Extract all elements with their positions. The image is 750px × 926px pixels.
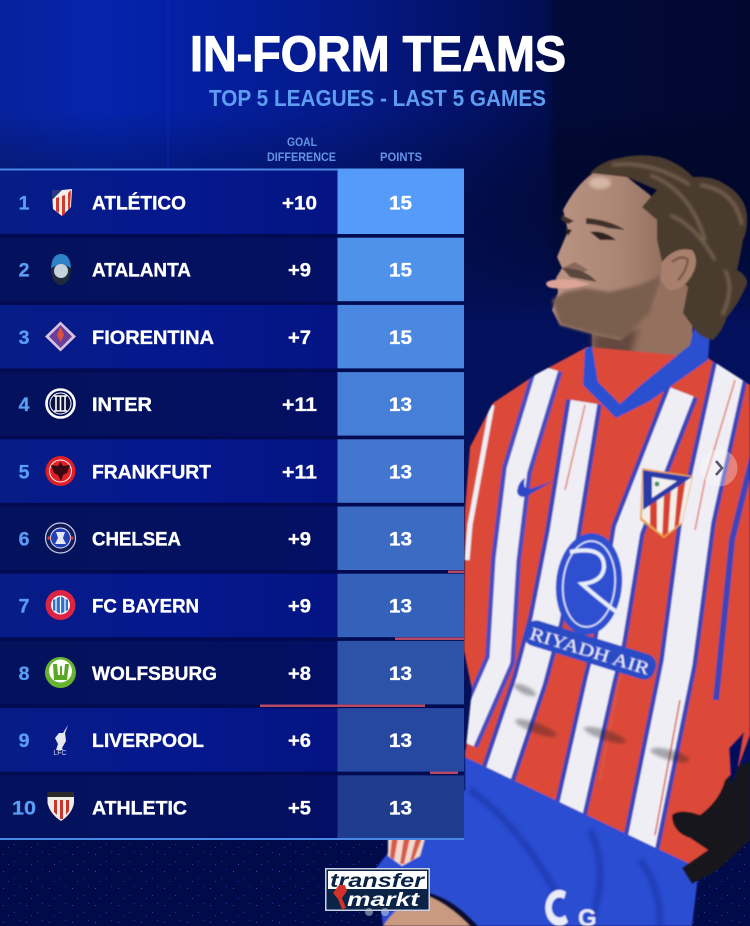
crest: Fiorentina xyxy=(45,322,76,352)
column header: points: POINTS xyxy=(380,150,422,164)
rank: 5 xyxy=(19,461,30,483)
goal difference: +11 xyxy=(282,394,317,416)
team name: INTER xyxy=(92,394,152,416)
points: 13 xyxy=(389,461,412,483)
crest: Atlético xyxy=(52,189,72,216)
row 6 xyxy=(0,506,464,570)
goal difference: +11 xyxy=(282,461,317,483)
rank: 6 xyxy=(19,528,30,550)
sponsor banner: RIYADH AIR xyxy=(527,623,652,679)
hair highlights xyxy=(612,164,742,315)
team name: CHELSEA xyxy=(92,528,181,550)
goal difference: +7 xyxy=(288,327,311,349)
crest: Atalanta xyxy=(51,254,71,285)
rank: 9 xyxy=(19,730,30,752)
shorts folds xyxy=(470,790,660,926)
goal difference: +9 xyxy=(288,260,311,282)
row 10 xyxy=(0,775,464,838)
points: 15 xyxy=(389,327,412,349)
stubble xyxy=(552,275,662,340)
nose shadow xyxy=(562,262,588,276)
mustache xyxy=(562,268,597,282)
leg xyxy=(383,894,476,926)
shorts xyxy=(376,750,700,926)
face xyxy=(552,173,672,340)
column header: goal difference: DIFFERENCE xyxy=(267,150,336,164)
transfermarkt logo: markt xyxy=(347,890,420,911)
crest: FC Bayern xyxy=(46,590,76,620)
team name: FRANKFURT xyxy=(92,461,211,483)
points: 13 xyxy=(389,528,412,550)
rank: 10 xyxy=(12,797,36,819)
crest: Wolfsburg xyxy=(45,657,76,688)
sponsor banner xyxy=(521,618,659,682)
points: 13 xyxy=(389,596,412,618)
jersey xyxy=(455,340,750,880)
shorts logo xyxy=(545,890,597,926)
neck xyxy=(592,270,694,405)
crest: Chelsea xyxy=(46,523,76,553)
glove xyxy=(672,762,750,884)
forehead highlight xyxy=(589,177,611,189)
points: 13 xyxy=(389,663,412,685)
rank: 8 xyxy=(19,663,30,685)
team name: FIORENTINA xyxy=(92,327,214,349)
table bottom rule xyxy=(0,838,464,840)
tongue xyxy=(546,279,590,288)
rank: 7 xyxy=(19,596,29,618)
sponsor R logo xyxy=(552,530,626,638)
jersey crest xyxy=(640,468,695,540)
crest: Frankfurt xyxy=(46,456,76,486)
team name: FC BAYERN xyxy=(92,596,199,618)
jersey folds xyxy=(512,681,691,765)
table slivers xyxy=(260,570,464,774)
carousel dots xyxy=(365,908,389,916)
team name: ATHLETIC xyxy=(92,797,187,819)
row 2 xyxy=(0,238,464,301)
jersey swoosh xyxy=(517,478,553,497)
table top rule xyxy=(0,168,338,170)
crest: Athletic xyxy=(48,792,74,821)
crest: Liverpool: LFC xyxy=(53,750,67,757)
row 1 xyxy=(0,168,464,234)
jersey stripes xyxy=(464,362,750,850)
collar xyxy=(583,324,710,418)
column header: goal difference: GOAL xyxy=(287,135,317,149)
title: IN-FORM TEAMS xyxy=(190,26,566,82)
goal difference: +5 xyxy=(288,797,311,819)
carousel next arrow xyxy=(700,450,738,486)
goal difference: +10 xyxy=(282,192,317,214)
team name: ATLÉTICO xyxy=(92,192,186,214)
goal difference: +9 xyxy=(288,528,311,550)
ear xyxy=(660,249,696,290)
row 4 xyxy=(0,372,464,436)
goal difference: +9 xyxy=(288,596,311,618)
transfermarkt logo: transfer xyxy=(330,871,426,892)
team name: WOLFSBURG xyxy=(92,663,217,685)
row 7 xyxy=(0,574,464,637)
brows and eyes xyxy=(561,215,625,230)
column header: goal difference xyxy=(267,135,336,164)
team name: LIVERPOOL xyxy=(92,730,204,752)
player photo xyxy=(376,155,750,926)
team name: ATALANTA xyxy=(92,260,191,282)
points: 13 xyxy=(389,797,412,819)
rank: 2 xyxy=(19,260,30,282)
rank: 1 xyxy=(19,192,30,214)
points: 15 xyxy=(389,192,412,214)
rank: 4 xyxy=(19,394,30,416)
crest: Liverpool xyxy=(53,725,68,757)
points: 13 xyxy=(389,394,412,416)
row 8 xyxy=(0,641,464,704)
goal difference: +6 xyxy=(288,730,311,752)
crest: Inter xyxy=(46,390,74,418)
points: 13 xyxy=(389,730,412,752)
transfermarkt logo xyxy=(325,868,430,911)
league table xyxy=(0,168,464,840)
shorts crest xyxy=(388,838,425,866)
rank: 3 xyxy=(19,327,30,349)
points: 15 xyxy=(389,260,412,282)
row 9 xyxy=(0,708,464,772)
hair xyxy=(590,155,747,340)
subtitle: TOP 5 LEAGUES - LAST 5 GAMES xyxy=(209,85,546,111)
logo runner figure xyxy=(333,885,347,909)
row 3 xyxy=(0,305,464,368)
right sleeve gap xyxy=(729,732,744,785)
row 5 xyxy=(0,439,464,503)
goal difference: +8 xyxy=(288,663,311,685)
